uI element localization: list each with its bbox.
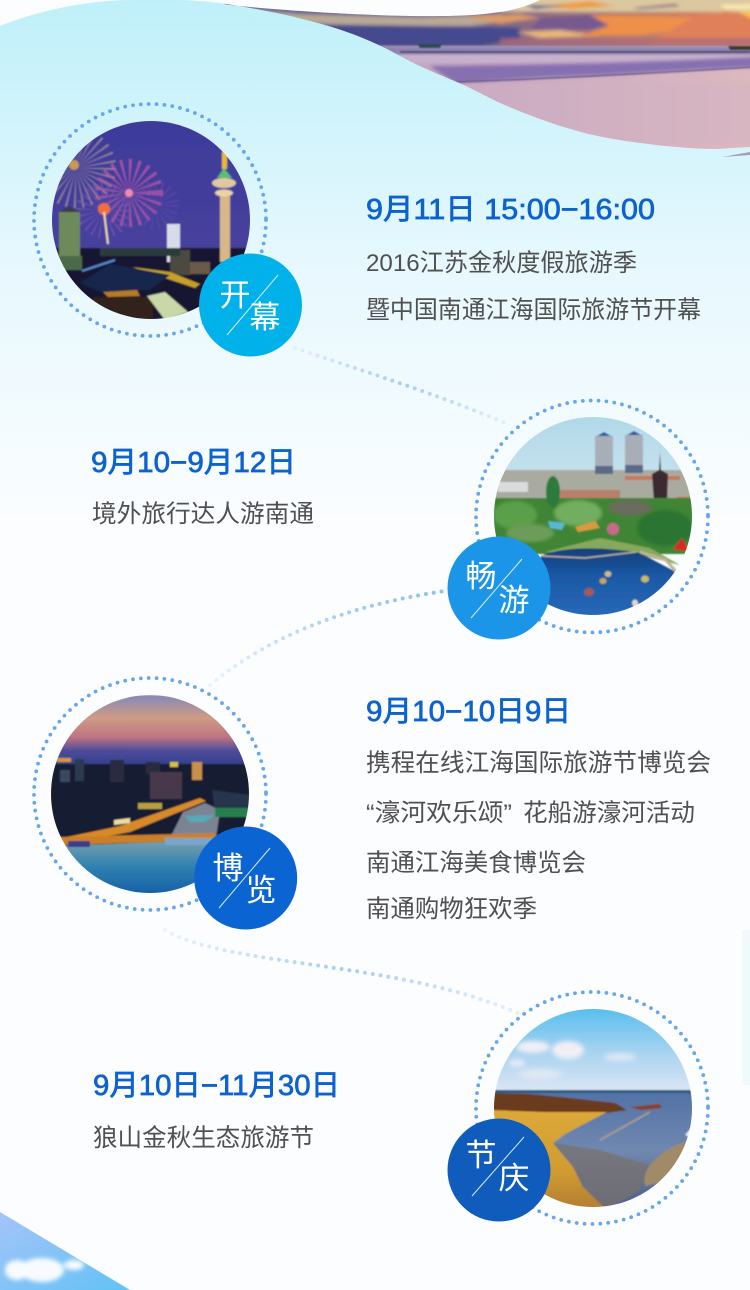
badge: expo <box>194 826 297 930</box>
text: expo: “濠河欢乐颂” <box>366 799 512 827</box>
bottom-left sky corner <box>0 1212 130 1290</box>
badge: opening: 幕 <box>250 300 280 335</box>
photo: night river <box>50 695 250 900</box>
sunset photo <box>225 0 750 156</box>
text: expo: 南通江海美食博览会 <box>366 849 586 877</box>
text: opening: 暨中国南通江海国际旅游节开幕 <box>366 296 701 324</box>
text: festival: 9月10日−11月30日 <box>93 1070 340 1102</box>
text: expo <box>366 696 711 923</box>
text: expo: 携程在线江海国际旅游节博览会 <box>366 749 711 777</box>
badge: opening <box>199 254 302 356</box>
badge: touring: 游 <box>498 583 530 618</box>
text: touring: 9月10−9月12日 <box>91 447 296 479</box>
text: opening: 9月11日 15:00−16:00 <box>366 194 655 226</box>
badge: festival <box>448 1118 550 1222</box>
photo: beach <box>490 1005 696 1212</box>
dotted connector 1 <box>295 348 510 425</box>
text: opening: 2016江苏金秋度假旅游季 <box>366 249 637 277</box>
text: touring <box>91 447 314 528</box>
badge: opening: 开 <box>220 278 250 313</box>
badge: festival: 庆 <box>498 1161 530 1196</box>
sunset sliver <box>722 152 750 157</box>
text: festival <box>93 1070 340 1152</box>
festival circle <box>448 992 708 1224</box>
badge: expo: 博 <box>212 851 244 886</box>
text: expo: 南通购物狂欢季 <box>366 895 537 923</box>
dotted connector 3 <box>165 930 522 1015</box>
opening circle <box>34 104 302 356</box>
photo: park lake <box>490 415 696 625</box>
expo circle <box>34 678 297 930</box>
badge: expo: 览 <box>246 873 276 908</box>
text: expo: 9月10−10日9日 <box>366 696 571 728</box>
text: touring: 境外旅行达人游南通 <box>92 500 314 528</box>
wave: light blue gradient <box>0 0 750 520</box>
text: festival: 狼山金秋生态旅游节 <box>93 1124 314 1152</box>
photo: fireworks city <box>50 120 252 322</box>
text: opening <box>366 194 701 324</box>
badge: touring <box>448 536 550 640</box>
badge: touring: 畅 <box>466 559 496 594</box>
touring circle <box>448 400 708 640</box>
text: expo: 花船游濠河活动 <box>523 799 695 827</box>
faint right stripe <box>742 930 750 1085</box>
dotted connector 2 <box>210 591 445 685</box>
badge: festival: 节 <box>466 1138 496 1173</box>
